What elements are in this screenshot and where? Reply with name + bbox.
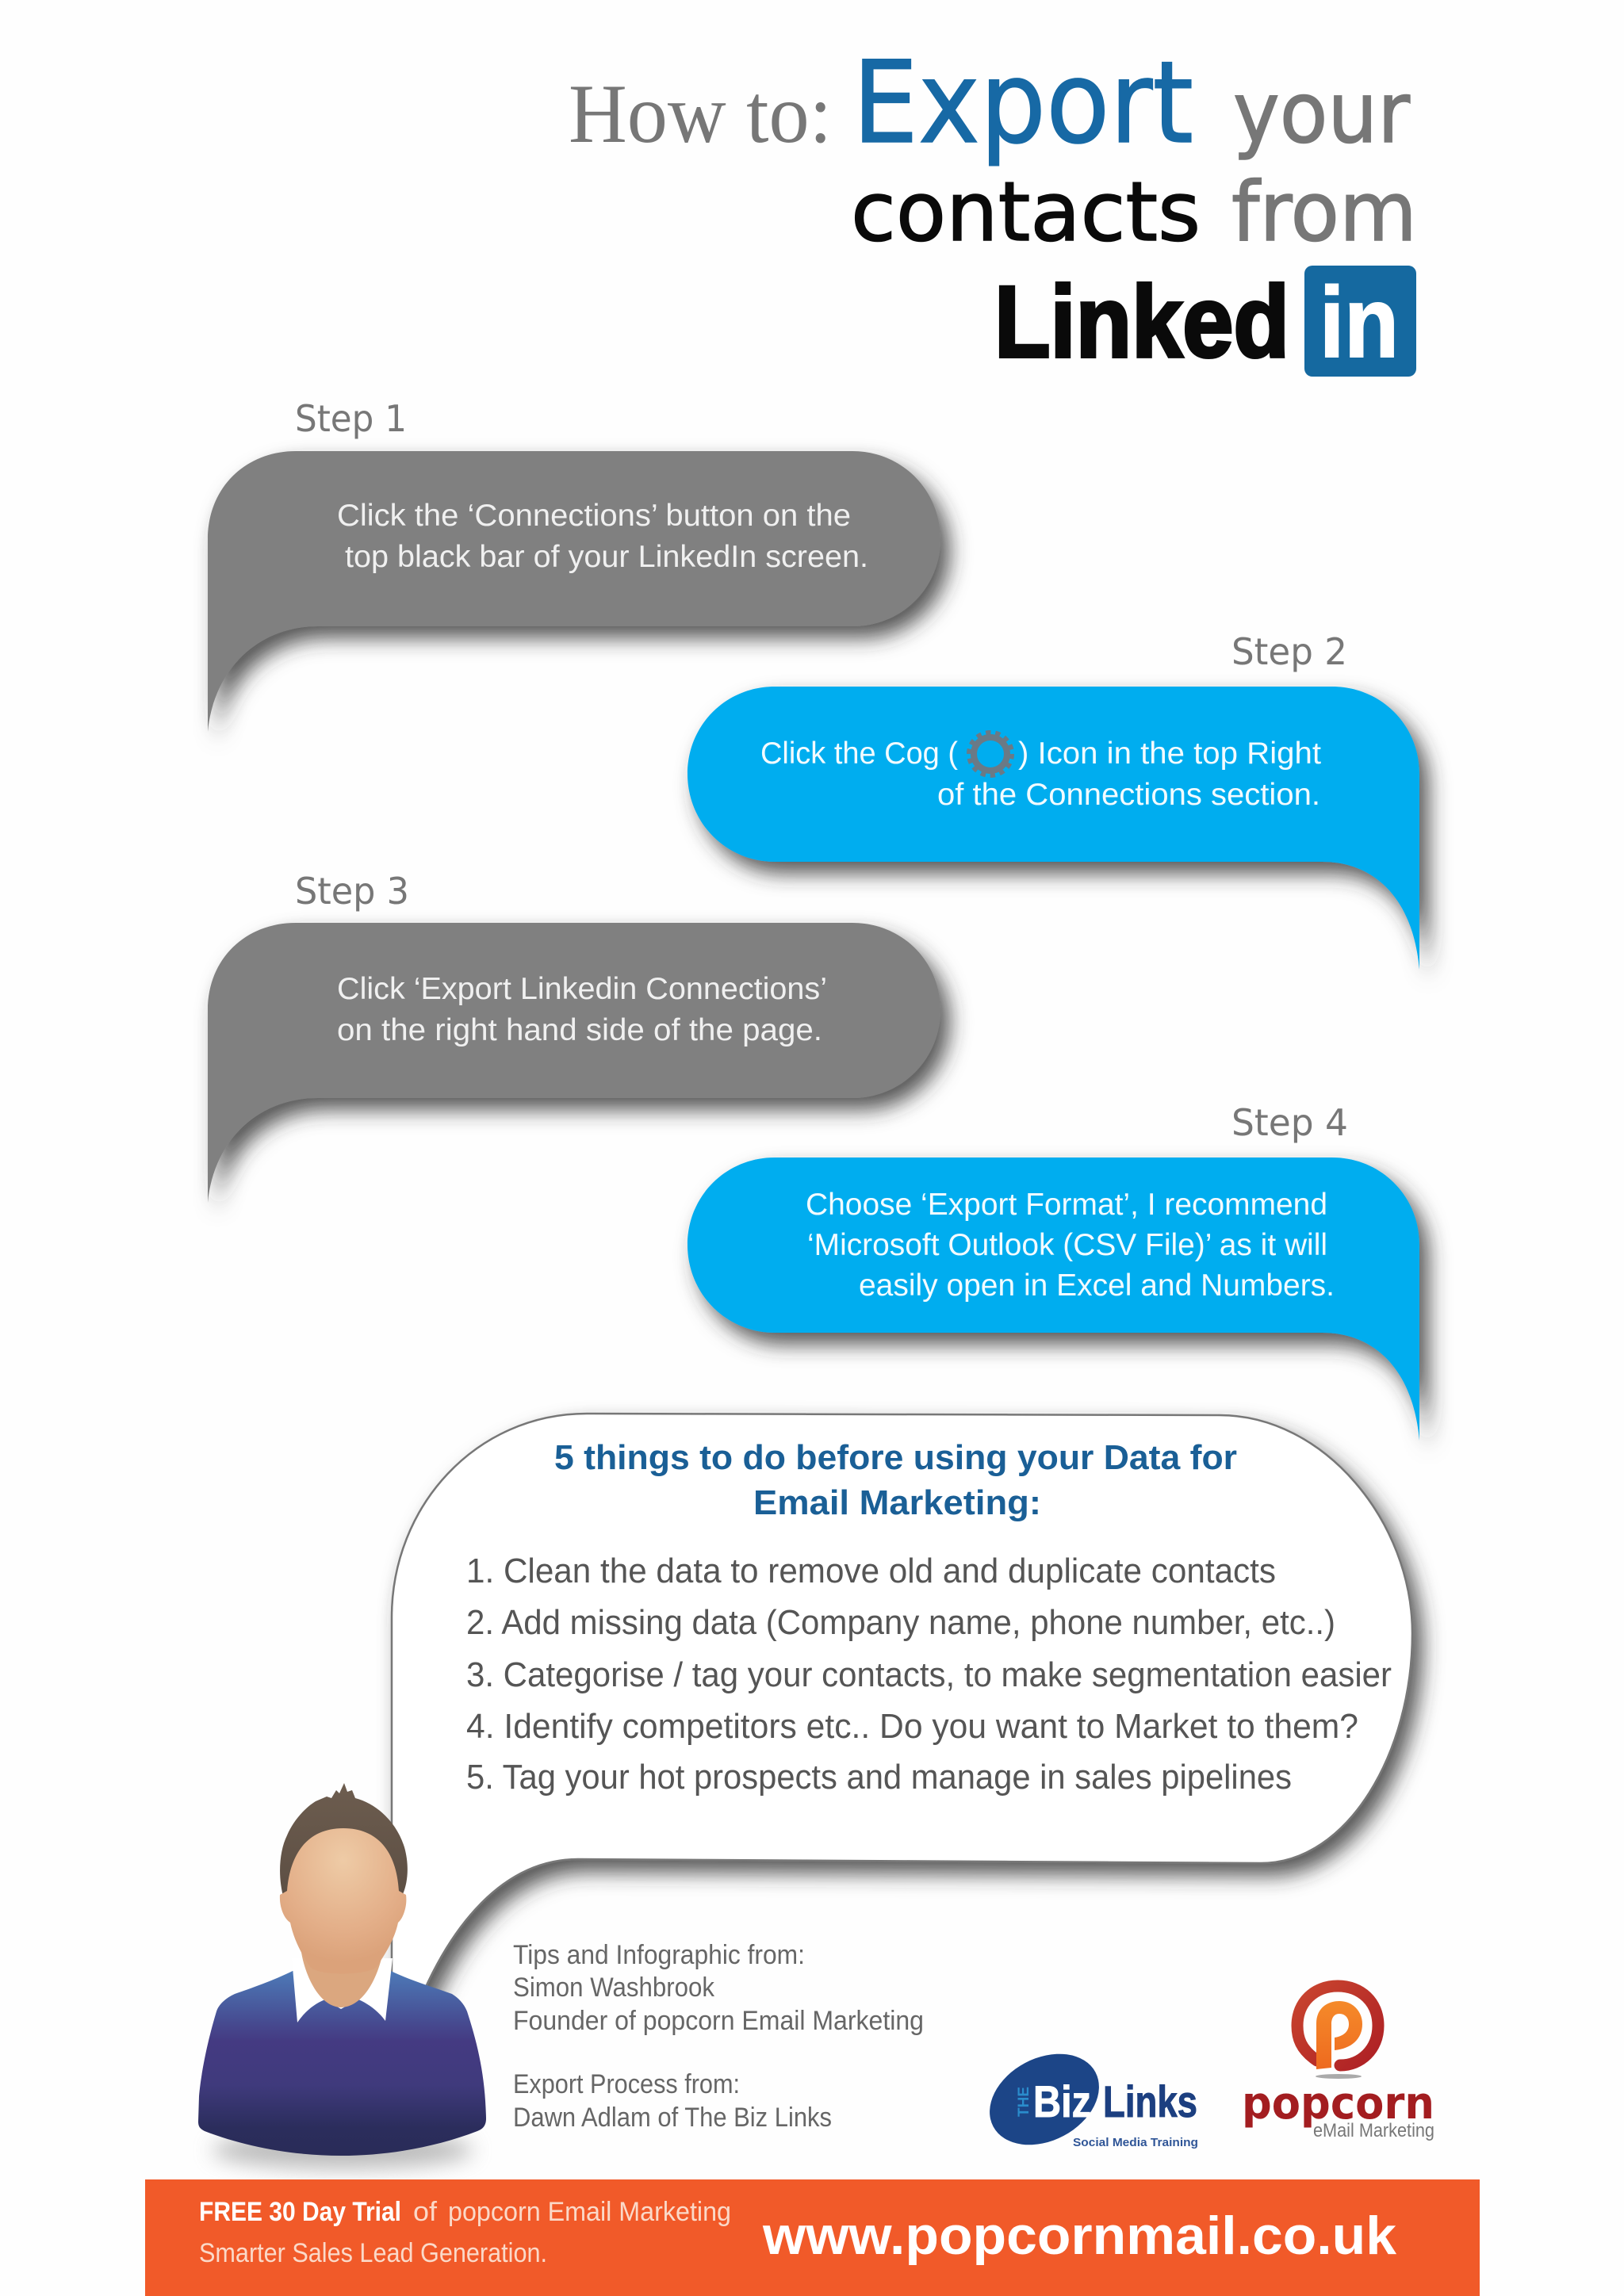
credits text [513, 1940, 924, 2133]
credits text: Export Process from: [513, 2069, 740, 2099]
step 1 text [337, 499, 868, 574]
icon: person avatar [198, 1783, 486, 2169]
step 4 text [806, 1188, 1335, 1303]
step 1 text: Click the ‘Connections’ button on the [337, 499, 851, 533]
list: 5 things: 5. Tag your hot prospects and manage in sales pipelines [466, 1758, 1292, 1797]
step 4 text: ‘Microsoft Outlook (CSV File)’ as it will [807, 1228, 1327, 1262]
credits text: Simon Washbrook [513, 1973, 715, 2003]
icon: cog [970, 733, 1011, 775]
credits text: Founder of popcorn Email Marketing [513, 2006, 924, 2036]
footer: free trial text: of [413, 2197, 438, 2227]
title: contacts: contacts [851, 165, 1201, 260]
credits text: Tips and Infographic from: [513, 1940, 805, 1970]
footer: free trial text: popcorn Email Marketing [448, 2197, 731, 2227]
list: 5 things: 4. Identify competitors etc.. Do you want to Market to them? [466, 1707, 1358, 1746]
logo: The Biz Links: Biz [1033, 2076, 1091, 2126]
footer: free trial text: FREE 30 Day Trial [199, 2197, 401, 2227]
title [569, 36, 1417, 379]
footer: website url: www.popcornmail.co.uk [762, 2206, 1396, 2266]
step 4 text: Choose ‘Export Format’, I recommend [806, 1188, 1327, 1222]
step 1 label: Step 1 [295, 397, 407, 440]
panel: 5 things bubble [392, 1414, 1412, 2030]
title: Export: Export [852, 36, 1193, 169]
step 2 text: ) Icon in the top Right [1018, 737, 1321, 771]
logo: The Biz Links: THE [1016, 2087, 1032, 2117]
heading: 5 things: 5 things to do before using your Data for [554, 1438, 1237, 1477]
heading: 5 things [554, 1438, 1237, 1522]
step 2 text [760, 737, 1321, 812]
step 4 text: easily open in Excel and Numbers. [859, 1269, 1335, 1303]
step 3 text: on the right hand side of the page. [337, 1013, 822, 1047]
footer: free trial text [199, 2197, 731, 2268]
step 3 text [337, 972, 827, 1047]
step 1 text: top black bar of your LinkedIn screen. [345, 540, 868, 574]
logo: The Biz Links: Links [1103, 2076, 1197, 2126]
panel: step 1 bubble [208, 451, 940, 732]
step 3 label: Step 3 [295, 870, 409, 913]
heading: 5 things: Email Marketing: [753, 1483, 1041, 1522]
step 4 label: Step 4 [1231, 1101, 1348, 1144]
panel: step 3 bubble [208, 923, 940, 1203]
list: 5 things: 2. Add missing data (Company name, phone number, etc..) [466, 1603, 1335, 1642]
logo: popcorn: popcorn [1242, 2078, 1434, 2130]
credits text: Dawn Adlam of The Biz Links [513, 2103, 832, 2133]
step 3 text: Click ‘Export Linkedin Connections’ [337, 972, 827, 1006]
title: How to: How to: [569, 67, 832, 160]
list: 5 things: 1. Clean the data to remove old and duplicate contacts [466, 1552, 1276, 1590]
logo: The Biz Links [974, 2036, 1198, 2163]
logo: The Biz Links: Social Media Training [1073, 2136, 1198, 2149]
footer bar [145, 2179, 1480, 2296]
step 2 text: Click the Cog ( [760, 737, 958, 771]
title: from: from [1231, 165, 1417, 260]
panel: step 4 bubble [688, 1158, 1419, 1441]
logo: popcorn: eMail Marketing [1313, 2120, 1434, 2141]
footer: free trial text: Smarter Sales Lead Generation. [199, 2238, 547, 2268]
step 2 label: Step 2 [1231, 630, 1347, 673]
step 2 text: of the Connections section. [937, 778, 1320, 812]
logo: popcorn [1242, 1986, 1434, 2141]
list: 5 things: 3. Categorise / tag your contacts, to make segmentation easier [466, 1655, 1392, 1694]
panel: step 2 bubble [688, 687, 1419, 970]
title: your: your [1233, 64, 1410, 162]
LinkedIn in badge: in [1320, 266, 1399, 378]
LinkedIn wordmark: Linked [994, 266, 1289, 379]
list: 5 things [466, 1552, 1392, 1797]
